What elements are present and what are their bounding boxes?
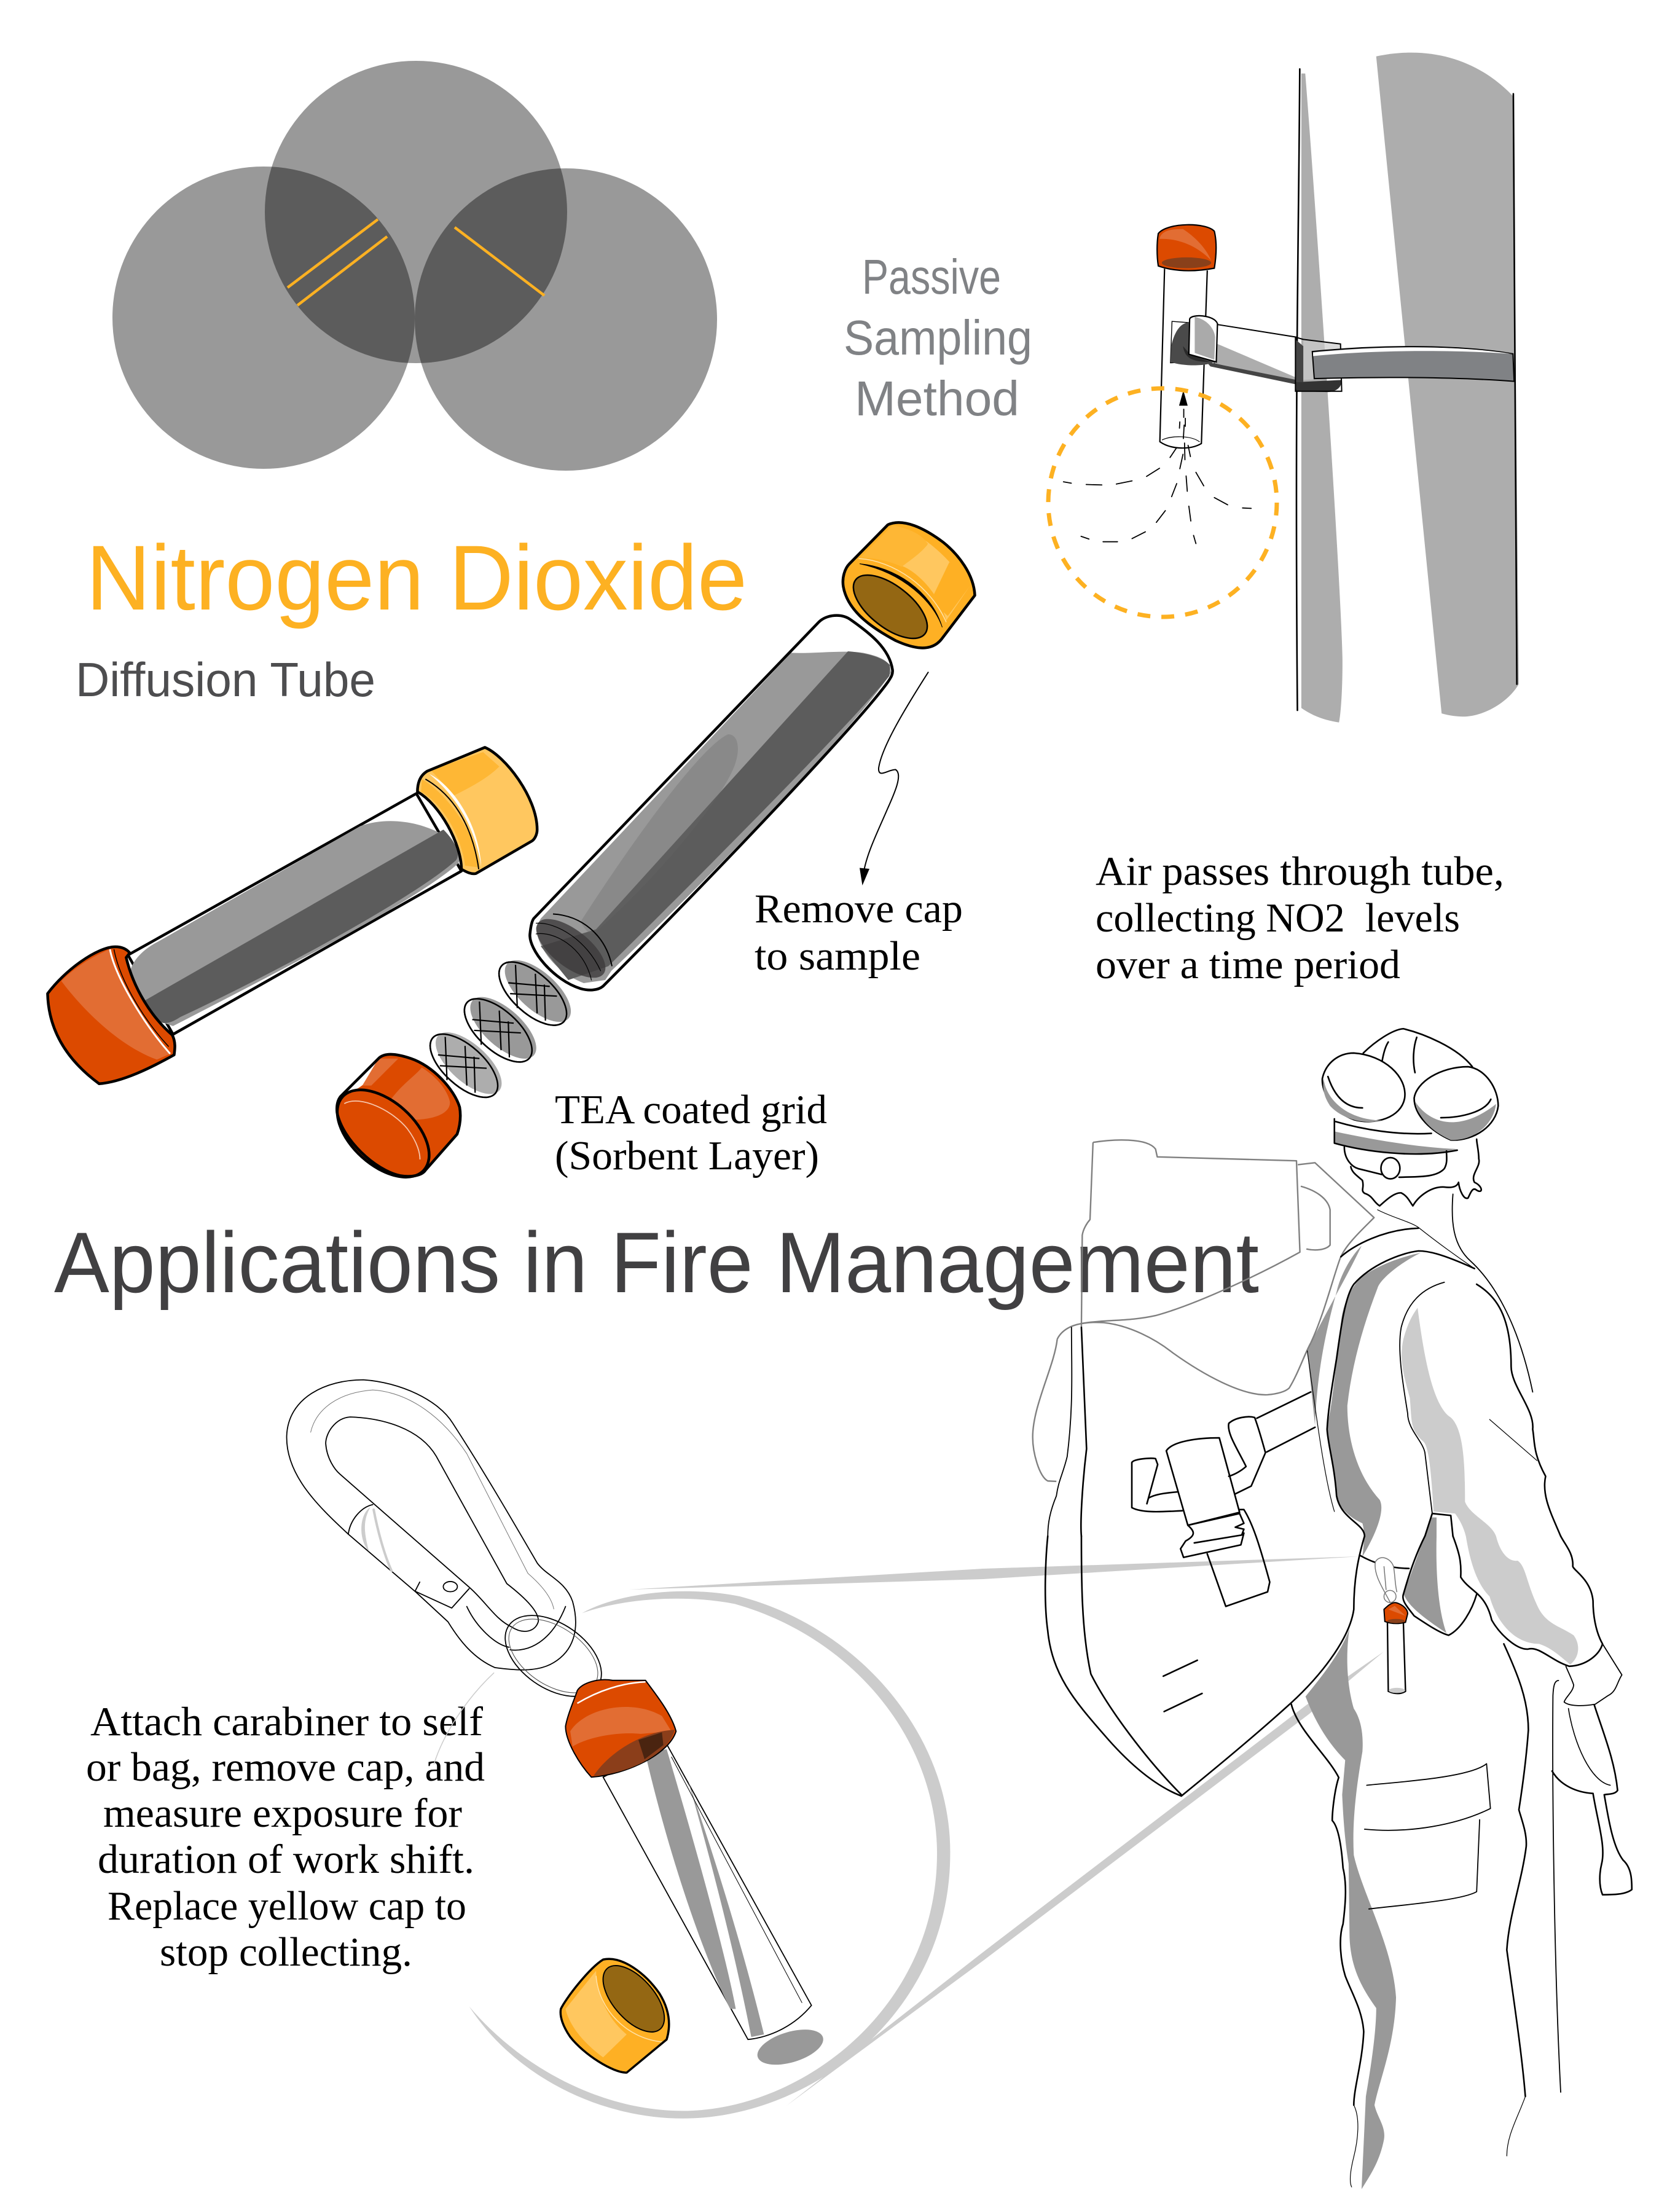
text: carabiner instructions: or bag, remove cap, and <box>86 1744 485 1790</box>
torso lines <box>1048 1228 1475 1536</box>
shading <box>1306 1536 1578 2189</box>
tube outline <box>530 616 893 990</box>
red cap <box>1157 225 1216 271</box>
small tube on person <box>1384 1602 1408 1693</box>
text: carabiner instructions: duration of work shift. <box>98 1837 474 1882</box>
tube grey fill <box>536 652 891 983</box>
illustration: passive sampler on pole <box>1064 53 1519 723</box>
text: carabiner instructions: Attach carabiner to self <box>90 1699 484 1744</box>
dark band <box>144 830 458 1023</box>
label: remove cap <box>755 886 963 979</box>
clip <box>1171 316 1217 366</box>
face and neck <box>1344 1139 1532 1392</box>
carabiner <box>287 1380 614 1713</box>
cuff and glove <box>1552 1644 1632 2092</box>
tool on backpack <box>1132 1417 1269 1606</box>
pole shading <box>1301 53 1519 723</box>
illustration: assembled diffusion tube <box>47 747 537 1084</box>
logo: three overlapping circles <box>112 61 717 471</box>
sorbent grid disc 3 <box>488 950 581 1037</box>
callout wedge lines <box>629 1556 1384 2106</box>
label: sorbent layer <box>555 1087 827 1179</box>
label: sorbent layer: (Sorbent Layer) <box>555 1133 819 1179</box>
mounting bracket <box>1207 324 1342 392</box>
helmet <box>1322 1029 1498 1154</box>
legs <box>1292 1644 1528 2187</box>
illustration: firefighter upper body <box>1033 1029 1561 1606</box>
text: carabiner instructions: Replace yellow cap to <box>108 1883 466 1929</box>
title: Nitrogen Dioxide <box>86 526 747 629</box>
red cap <box>47 947 175 1084</box>
grey fill <box>130 821 460 1026</box>
sorbent grid disc 2 <box>454 986 546 1073</box>
heading: passive sampling method: Sampling <box>844 310 1032 365</box>
subtitle: Diffusion Tube <box>76 653 375 707</box>
heading: passive sampling method: Passive <box>862 249 1001 304</box>
heading: applications in fire management: Applications in Fire Management <box>54 1214 1259 1311</box>
body <box>128 793 461 1034</box>
yellow cap <box>417 747 537 874</box>
backpack outline <box>1033 1140 1374 1481</box>
text: carabiner instructions: measure exposure for <box>103 1790 462 1836</box>
yellow cap <box>843 522 975 650</box>
tube <box>1160 269 1207 448</box>
label: remove cap: to sample <box>755 933 920 979</box>
heading: passive sampling method <box>844 249 1032 426</box>
strap <box>1312 347 1514 382</box>
tube dark band <box>541 651 890 980</box>
magnified red cap <box>565 1680 676 1777</box>
text: air passes through tube: Air passes through tube, <box>1096 849 1504 894</box>
tube open end <box>527 908 615 989</box>
dashed sampling circle <box>1048 388 1277 617</box>
heading: passive sampling method: Method <box>855 371 1019 426</box>
small carabiner on person <box>1375 1558 1397 1603</box>
arrow: remove cap <box>860 672 928 885</box>
tube highlight <box>581 734 738 934</box>
illustration: firefighter lower body <box>1045 1536 1632 2189</box>
pouch and sleeve <box>1403 1536 1602 1666</box>
magnified yellow cap <box>560 1954 675 2073</box>
label: sorbent layer: TEA coated grid <box>555 1087 827 1132</box>
magnified tube <box>603 1744 826 2071</box>
magnified view: circle ring <box>287 1380 950 2119</box>
separated red cap <box>321 1054 460 1194</box>
text: air passes through tube <box>1096 849 1504 987</box>
shading <box>1308 1246 1496 1556</box>
illustration: tube base assembly <box>321 950 581 1194</box>
cargo pocket <box>1365 1763 1491 1909</box>
arrow in tube <box>1179 390 1188 406</box>
label: remove cap: Remove cap <box>755 886 963 931</box>
text: air passes through tube: collecting NO2 levels <box>1096 895 1460 941</box>
text: carabiner instructions <box>86 1699 485 1975</box>
sorbent grid disc 1 <box>420 1022 512 1108</box>
illustration: open diffusion tube with yellow cap <box>527 522 975 990</box>
backpack bottom <box>1045 1536 1409 1796</box>
air flow lines <box>1064 409 1251 544</box>
arm and sleeve <box>1400 1282 1561 1536</box>
text: carabiner instructions: stop collecting. <box>160 1929 412 1975</box>
text: air passes through tube: over a time period <box>1096 942 1400 987</box>
tube body <box>530 616 893 990</box>
